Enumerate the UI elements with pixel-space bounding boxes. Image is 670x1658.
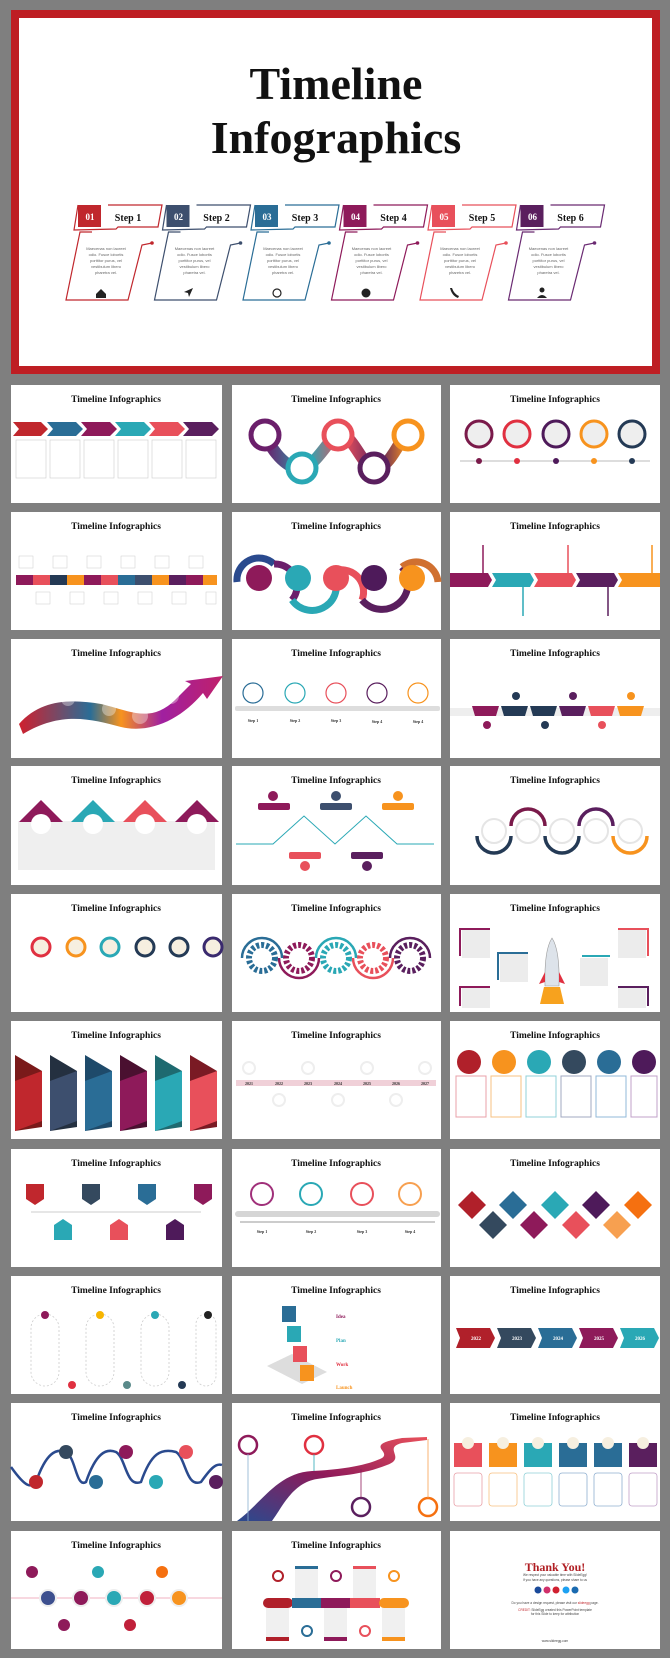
tile r8c2: isometric steps: Idea (336, 1315, 346, 1320)
tile r7c3: diamonds: Timeline Infographics (510, 1159, 600, 1169)
step labels: 02 (174, 212, 184, 222)
tile r2c1: month bar (11, 512, 222, 630)
step labels: Step 1 (115, 213, 141, 224)
tile r3c2: pins on bar: Step 3 (331, 718, 341, 723)
tile r6c1: folded banners: Timeline Infographics (71, 1031, 161, 1041)
tile r5c1: ringed circles (11, 894, 222, 1012)
tile r6c2: light year timeline: 2024 (334, 1081, 342, 1086)
step body text: Maecenas non laoreet (352, 246, 392, 251)
tile r4c3: wave circles (450, 766, 660, 885)
step icons (96, 288, 547, 298)
step body text: pharetra vel. (95, 270, 117, 275)
tile r5c2: gears: Timeline Infographics (291, 904, 381, 914)
tile r2c2: circle arcs: Timeline Infographics (291, 522, 381, 532)
tile r6c2: light year timeline: 2026 (392, 1081, 400, 1086)
step body text: porttitor purus, vel (532, 258, 565, 263)
tile r1c3: pins (450, 385, 660, 503)
step labels: Step 3 (292, 213, 318, 224)
tile r7c2: rings on bar: Step 1 (257, 1229, 267, 1234)
tile r3c2: pins on bar: Step 4 (413, 719, 423, 724)
step labels: Step 5 (469, 213, 495, 224)
step body text: pharetra vel. (537, 270, 560, 275)
tile r9c1: wave numbers (11, 1403, 223, 1521)
tile r7c2: rings on bar: Step 2 (306, 1229, 316, 1234)
tile r3c3: week tags (450, 639, 660, 758)
tile r8c3: year arrows: 2023 (512, 1337, 522, 1342)
tile r6c2: light year timeline: 2027 (421, 1081, 429, 1086)
tile r10c2: week bar: Timeline Infographics (291, 1541, 381, 1551)
step body text: odio. Fusce lobortis (177, 252, 212, 257)
step body text: Maecenas non laoreet (175, 246, 215, 251)
tile r3c1: ribbon arrow: Timeline Infographics (71, 649, 161, 659)
tile r7c2: rings on bar (232, 1149, 441, 1267)
tile r7c1: tags (11, 1149, 222, 1267)
step body text: porttitor purus, vel (355, 258, 388, 263)
tile r8c2: isometric steps (232, 1276, 441, 1394)
step labels: 01 (86, 212, 95, 222)
step body text: vestibulum libero (91, 264, 122, 269)
step labels: Step 2 (203, 213, 230, 224)
step body text: pharetra vel. (360, 270, 383, 275)
tile r8c3: year arrows: 2025 (594, 1337, 604, 1342)
tile r1c2: loop circles: Timeline Infographics (291, 395, 381, 405)
step body text: vestibulum libero (445, 264, 476, 269)
tile r6c2: light year timeline (232, 1021, 441, 1139)
step labels: Step 4 (380, 213, 407, 224)
tile r9c3: speech boxes (450, 1403, 660, 1521)
tile r10c3: thank you: Thank You! (525, 1560, 585, 1574)
tile r3c2: pins on bar: Step 1 (248, 718, 258, 723)
step body text (86, 246, 569, 275)
step labels: 06 (528, 212, 538, 222)
tile r8c3: year arrows: Timeline Infographics (510, 1286, 600, 1296)
title (211, 58, 461, 163)
tile r10c2: week bar (232, 1531, 441, 1649)
tile r8c2: isometric steps: Work (336, 1363, 348, 1368)
tile r5c3: rocket: Timeline Infographics (510, 904, 600, 914)
tile r3c2: pins on bar: Step 2 (290, 718, 300, 723)
step body text: odio. Fusce lobortis (354, 252, 389, 257)
tile r6c2: light year timeline: 2025 (363, 1081, 371, 1086)
tile r7c3: diamonds (450, 1149, 660, 1267)
tile r8c3: year arrows: 2026 (635, 1337, 646, 1342)
tile r3c3: week tags: Timeline Infographics (510, 649, 600, 659)
tile r7c1: tags: Timeline Infographics (71, 1159, 161, 1169)
step body text: pharetra vel. (449, 270, 471, 275)
step body text: porttitor purus, vel (90, 258, 122, 263)
tile r10c3: thank you: for this Slide to keep for attribution (531, 1612, 579, 1616)
step body text: pharetra vel. (183, 270, 206, 275)
tile r6c2: light year timeline: 2021 (245, 1081, 253, 1086)
tile r7c2: rings on bar: Step 3 (357, 1229, 367, 1234)
tile r8c1: dashed loops: Timeline Infographics (71, 1286, 161, 1296)
tile r8c1: dashed loops (11, 1276, 222, 1394)
tile r8c3: year arrows (450, 1276, 660, 1394)
tile r1c3: pins: Timeline Infographics (510, 395, 600, 405)
tile r2c3: year arrows: Timeline Infographics (510, 522, 600, 532)
tile r1c2: loop circles (232, 385, 441, 503)
panel: tile grid (11, 385, 660, 1649)
tile r6c2: light year timeline: Timeline Infographics (291, 1031, 381, 1041)
tile r6c2: light year timeline: 2022 (275, 1081, 283, 1086)
step labels: 05 (440, 212, 449, 222)
tile r6c1: folded banners (11, 1021, 222, 1139)
panel: hero slide (11, 10, 660, 374)
step labels (86, 212, 584, 224)
tile r2c2: circle arcs (232, 512, 441, 630)
tile r4c1: houses: Timeline Infographics (71, 776, 161, 786)
step body text: porttitor purus, vel (267, 258, 299, 263)
tile r1c1: chevron steps (11, 385, 222, 503)
tile r5c3: rocket (450, 894, 660, 1012)
step body text: Maecenas non laoreet (86, 246, 127, 251)
step body text: odio. Fusce lobortis (266, 252, 300, 257)
tile r8c2: isometric steps: Plan (336, 1339, 346, 1344)
tile r10c3: thank you: We respect your valuable time with SlideEgg! (523, 1573, 587, 1577)
tile r9c2: road: Timeline Infographics (291, 1413, 381, 1423)
tile r10c3: thank you: CREDIT: SlideEgg created this PowerPoint template (518, 1608, 592, 1612)
step body text: odio. Fusce lobortis (89, 252, 123, 257)
step labels: 03 (262, 212, 272, 222)
step body text: vestibulum libero (179, 264, 210, 269)
step body text: porttitor purus, vel (444, 258, 476, 263)
tile r3c2: pins on bar (232, 639, 441, 758)
step labels: Step 6 (557, 213, 584, 224)
tile r6c3: circle headers: Timeline Infographics (510, 1031, 600, 1041)
tile r10c3: thank you: If you have any questions, please share to us (523, 1578, 587, 1582)
tile r10c3: thank you: www.slideegg.com (542, 1639, 569, 1643)
tile r8c2: isometric steps: Timeline Infographics (291, 1286, 381, 1296)
tile r10c3: thank you: Do you have a design request, please visit our slideegg page. (511, 1601, 599, 1605)
step body text: odio. Fusce lobortis (531, 252, 566, 257)
tile r2c3: year arrows (450, 512, 660, 630)
step body text: Maecenas non laoreet (263, 246, 304, 251)
tile r8c3: year arrows: 2024 (553, 1337, 564, 1342)
tile r7c2: rings on bar: Step 4 (405, 1229, 415, 1234)
tile r3c1: ribbon arrow (11, 639, 223, 758)
step body text: vestibulum libero (268, 264, 299, 269)
tile r10c3: thank you (450, 1531, 660, 1649)
tile r10c1: circle timeline (11, 1531, 222, 1649)
tile r1c1: chevron steps: Timeline Infographics (71, 395, 161, 405)
step labels: 04 (351, 212, 360, 222)
title: Timeline (250, 58, 422, 109)
step body text: Maecenas non laoreet (440, 246, 481, 251)
tile r5c2: gears (232, 894, 441, 1012)
tile r3c2: pins on bar: Timeline Infographics (291, 649, 381, 659)
step body text: porttitor purus, vel (178, 258, 211, 263)
title: Infographics (211, 112, 461, 163)
tile r4c2: zigzag (232, 766, 441, 885)
tile r2c1: month bar: Timeline Infographics (71, 522, 161, 532)
tile r9c1: wave numbers: Timeline Infographics (71, 1413, 161, 1423)
tile r8c3: year arrows: 2022 (471, 1337, 482, 1342)
tile r10c1: circle timeline: Timeline Infographics (71, 1541, 161, 1551)
tile r8c2: isometric steps: Launch (336, 1386, 353, 1391)
step body text: Maecenas non laoreet (529, 246, 569, 251)
tile r7c2: rings on bar: Timeline Infographics (291, 1159, 381, 1169)
tile r6c2: light year timeline: 2023 (304, 1081, 312, 1086)
step body text: pharetra vel. (272, 270, 294, 275)
step cards (66, 205, 604, 300)
tile r9c3: speech boxes: Timeline Infographics (510, 1413, 600, 1423)
step body text: odio. Fusce lobortis (443, 252, 477, 257)
tile r3c2: pins on bar: Step 4 (372, 719, 382, 724)
tile r4c3: wave circles: Timeline Infographics (510, 776, 600, 786)
step body text: vestibulum libero (356, 264, 387, 269)
step body text: vestibulum libero (533, 264, 564, 269)
tile r4c2: zigzag: Timeline Infographics (291, 776, 381, 786)
tile r5c1: ringed circles: Timeline Infographics (71, 904, 161, 914)
tile r4c1: houses (11, 766, 222, 885)
tile r9c2: road (232, 1403, 441, 1521)
tile r6c3: circle headers (450, 1021, 660, 1139)
